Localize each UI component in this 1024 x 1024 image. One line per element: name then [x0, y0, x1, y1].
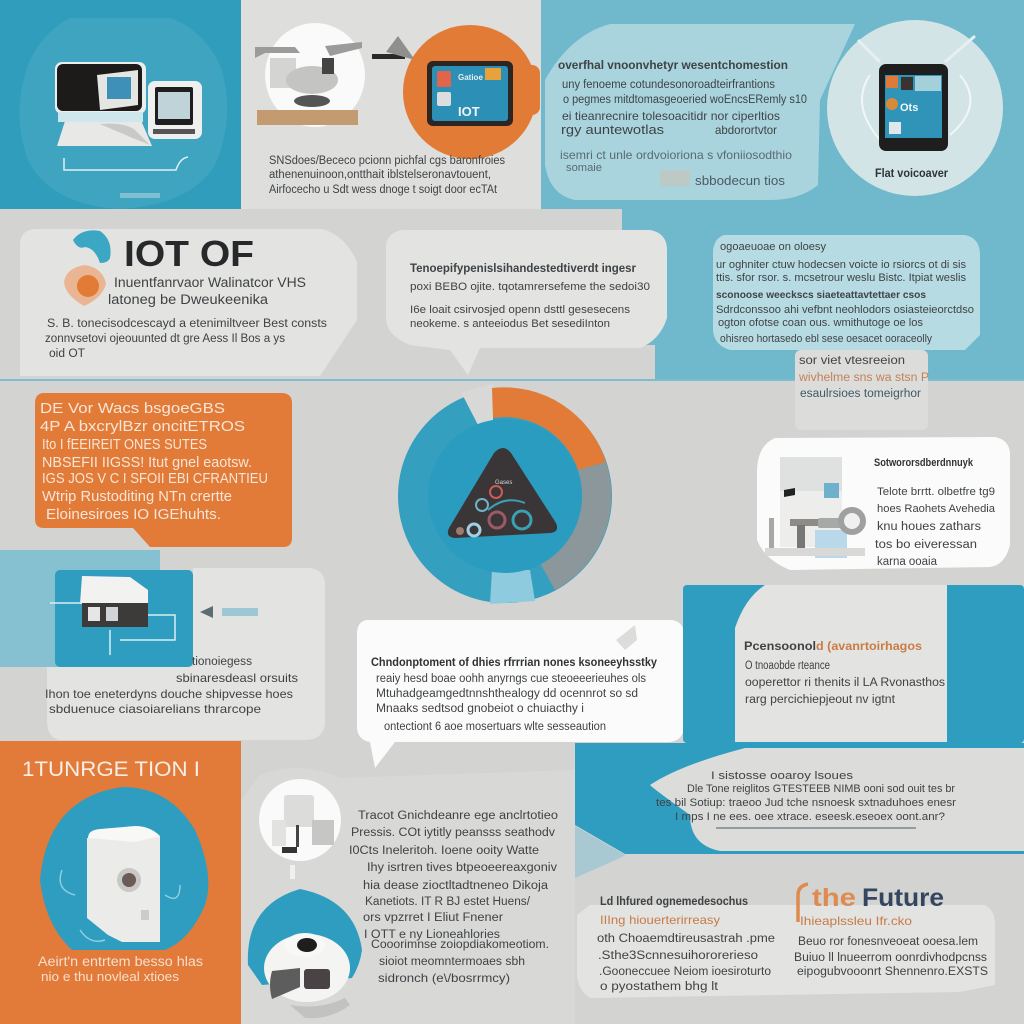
card: IOT intro: zonnvsetovi ojeouunted dt gre Aess Il Bos a ys [45, 333, 285, 345]
icon: triangle IoT network: Gases [495, 480, 512, 486]
heading: the future: Ihieaplssleu Ifr.cko [800, 914, 912, 928]
panel: right teal percent card: d (avanrtoirhagos [816, 641, 922, 653]
panel: bottom-right teal note [575, 743, 1024, 854]
card: right appliance: tos bo eiveressan [875, 539, 977, 551]
card: middle description [386, 230, 667, 375]
icon: orange circle tablet [403, 25, 540, 159]
panel: orange text card [35, 393, 292, 547]
heading: the future [798, 884, 944, 928]
text block: lower [371, 937, 549, 985]
icon: triangle IoT network [448, 448, 557, 538]
panel: bottom-left orange function: Aeirt'n entrtem besso hlas [38, 954, 203, 969]
card: right description: ur oghniter ctuw hodecsen voicte io rsiorcs ot di sis [716, 259, 966, 271]
card: central white development: Mtuhadgeamgedtnnshthealogy dd ocennrot so sd [376, 688, 638, 700]
icon: orange swirl logo [64, 265, 106, 306]
text block: Airfocecho u Sdt wess dnoge t soigt door ecTAt [269, 184, 498, 196]
text block: upper: ors vpzrret I Eliut Fnener [363, 912, 503, 924]
text block: left: oth Choaemdtireusastrah .pme [597, 933, 775, 945]
text block: lower: sioiot meomntermoaes sbh [379, 956, 525, 968]
card: right description: ogton ofotse coan ous. wmithutoge oe los [718, 317, 923, 329]
text block: athenenuinoon,ontthait iblstelseronavtouent, [269, 169, 491, 181]
overview card: rgy auntewotlas [561, 123, 664, 137]
card: right description: Sdrdconssoo ahi vefbnt neohlodors osiasteieorctdso [716, 304, 974, 316]
icon: white appliance [255, 23, 365, 127]
panel: right teal percent card: O tnoaobde rteance [745, 660, 830, 672]
panel: IOT heading row [0, 209, 667, 380]
card: right description: ohisreo hortasedo ebl sese oesacet ooraceolly [720, 333, 932, 345]
panel: bottom-right teal note: I sistosse ooaroy lsoues [711, 770, 854, 782]
icon: teal circle appliance [40, 787, 208, 950]
overview card: sbbodecun tios [695, 174, 785, 188]
panel: left router: sbduenuce ciasoiarelians thrarcope [49, 702, 261, 716]
heading: the future: Future [862, 884, 944, 912]
text block: lower: Cooorimnse zoiopdiakomeotiom. [371, 937, 549, 951]
arrow [200, 606, 258, 618]
icon: coffee machine [765, 457, 865, 558]
card: right description: ttis. sfor rsor. s. mcsetrour weslu Bistc. Itpiat weslis [716, 272, 967, 284]
card: IOT intro: oid OT [49, 348, 85, 360]
panel: top-middle product [241, 0, 545, 210]
panel: right teal percent card [683, 585, 1024, 743]
overview card: ei tieanrecnire tolesoacitidr nor ciperltios [562, 109, 780, 123]
card: right appliance [757, 437, 1010, 570]
icon: orange circle tablet: IOT [458, 104, 480, 119]
card: central white development: reaiy hesd boae oohh anyrngs cue steoeeerieuhes ols [376, 673, 646, 685]
text block: upper: Kanetiots. IT R BJ estet Huens/ [365, 896, 531, 908]
card: small orange note: esaulrsioes tomeigrhor [800, 388, 921, 400]
card: middle description: neokeme. s anteeiodus Bet sesediInton [410, 318, 610, 330]
panel: left router: Ihon toe eneterdyns douche shipvesse hoes [45, 687, 293, 701]
card: central white development: Mnaaks sedtsod gnobeiot o chuiacthy i [376, 703, 584, 715]
text block: left: .Sthe3Scnnesuihororerieso [598, 950, 758, 962]
text block: upper [349, 810, 558, 941]
text block: right: Buiuo ll lnueerrom oonrdivhodpcnss [794, 952, 987, 964]
card: small orange note: sor viet vtesreeion [799, 355, 905, 367]
text block [269, 155, 505, 196]
text block: left: o pyostathem bhg lt [600, 981, 719, 993]
card: small orange note [795, 350, 929, 430]
card: IOT intro: Inuentfanrvaor Walinatcor VHS [114, 275, 306, 290]
card: central white development: ontectiont 6 aoe mosertuars wlte sesseaution [384, 721, 606, 733]
text block: upper: Tracot Gnichdeanre ege anclrtotieo [358, 810, 558, 822]
card: IOT intro: S. B. tonecisodcescayd a etenimiltveer Best consts [47, 318, 327, 330]
card: right description: ogoaeuoae on oloesy [720, 241, 826, 253]
icon: phone [879, 64, 948, 151]
text block: lower: sidronch (e\/bosrrmcy) [378, 971, 510, 985]
icon: teal dome device [248, 889, 362, 1018]
icon: router device [50, 576, 175, 655]
panel: orange text card: 4P A bxcrylBzr oncitETROS [40, 418, 245, 435]
card: right appliance: Sotwororsdberdnnuyk [874, 457, 974, 469]
panel: top-right teal background [541, 0, 1024, 380]
chart: central donut [398, 384, 612, 604]
text block: right: eipogubvooonrt Shennenro.EXSTS [797, 966, 988, 978]
text block: left: IIIng hiouerterirreasy [600, 913, 720, 927]
panel: right teal percent card: ooperettor ri thenits il LA Rvonasthos [745, 677, 945, 689]
heading: the future: the [812, 884, 856, 912]
panel: orange text card: IGS JOS V C I SFOII EBI CFRANTIEU [42, 470, 268, 487]
card: small orange note: wivhelme sns wa stsn P [798, 372, 929, 384]
card: IOT intro: latoneg be Dweukeenika [108, 292, 269, 307]
panel: left router: sbinaresdeasl orsuits [176, 671, 298, 685]
overview card: somaie [566, 162, 602, 174]
text block: left: .Gooneccuee Neiom ioesiroturto [599, 966, 771, 978]
icon: phone: Ots [900, 102, 918, 114]
overview card: uny fenoeme cotundesonoroadteirfrantions [562, 79, 775, 91]
divider band [0, 379, 1024, 381]
panel: orange text card: NBSEFII IIGSS! Itut gnel eaotsw. [42, 454, 252, 471]
overview card: overfhal vnoonvhetyr wesentchomestion [558, 60, 788, 72]
card: IOT intro [20, 229, 357, 376]
card: right appliance: knu houes zathars [877, 521, 981, 533]
phone circle [827, 20, 1003, 196]
text block: left: Ld lhfured ognemedesochus [600, 896, 748, 908]
panel: the future [575, 826, 1024, 1024]
card: right description [713, 235, 980, 350]
text block: upper: I OTT e ny Lioneahlories [364, 929, 500, 941]
card: right appliance: karna ooaia [877, 556, 938, 568]
panel: bottom-right teal note: Dle Tone reiglitos GTESTEEB NIMB ooni sod ouit tes br [687, 783, 955, 795]
panel: orange text card: Eloinesiroes IO IGEhuhts. [46, 506, 221, 523]
card: right appliance: Telote brrtt. olbetfre tg9 [877, 486, 995, 498]
panel: bottom-left orange function: nio e thu novleal xtioes [41, 969, 180, 984]
panel: bottom-right teal note: I mps I ne ees. oee xtrace. eseesk.eseoex oont.anr? [675, 811, 945, 823]
text block: SNSdoes/Bececo pcionn pichfal cgs baronfroies [269, 155, 505, 167]
heading: 1TUNRGE TION I [22, 758, 200, 781]
panel: bottom-right teal note: tes bil Sotiup: traeoo Jud tche nsnoesk sxtnaduhoes enesr [656, 797, 956, 809]
card: right appliance: hoes Raohets Avehedia [877, 503, 996, 515]
card: central white development: Chndonptoment of dhies rfrrrian nones ksoneeyhsstky [371, 657, 658, 669]
overview card: o pegmes mitdtomasgeoeried woEncsERemly s10 [563, 94, 807, 106]
text block: right [794, 936, 988, 978]
panel: orange text card: Wtrip Rustoditing NTn crertte [42, 488, 232, 505]
text block: upper: I0Cts Ineleritoh. Ioene ooity Watte [349, 845, 539, 857]
panel: top-left devices [0, 0, 241, 209]
card: central white development [357, 620, 684, 768]
title: IOT OF [124, 233, 254, 274]
card: right description: sconoose weeckscs siaeteattavtettaer csos [716, 289, 926, 301]
phone circle: Flat voicoaver [875, 168, 948, 180]
text block: upper: hia dease zioctltadtneneo Dikoja [363, 880, 549, 892]
text block: left [597, 896, 775, 993]
text block: upper: Pressis. COt iytitly peansss seathodv [351, 827, 555, 839]
icon: teal swirl logo [73, 230, 111, 263]
card: middle description: poxi BEBO ojite. tqotamrersefeme the sedoi30 [410, 281, 650, 293]
panel: orange text card: DE Vor Wacs bsgoeGBS [40, 400, 225, 417]
panel: left router: tionoiegess [192, 656, 252, 668]
panel: left router [0, 550, 325, 740]
panel: bottom-middle column [241, 768, 575, 1024]
icon: desktop monitor [55, 62, 152, 146]
text block: upper: Ihy isrtren tives btpeoeereaxgoniv [367, 862, 557, 874]
panel: right teal percent card: Pcensoonol [744, 641, 816, 653]
overview card: isemri ct unle ordvoioriona s vfoniiosodthio [560, 148, 792, 162]
card: middle description: I6e loait csirvosjed openn dsttl gesesecens [410, 304, 631, 316]
text block: right: Beuo ror fonesnveoeat ooesa.lem [798, 936, 978, 948]
overview card: abdorortvtor [715, 123, 777, 137]
icon: orange circle tablet: Gatioe [458, 73, 483, 82]
icon: white kitchen circle [259, 779, 341, 879]
panel: orange text card: Ito I fEEIREIT ONES SUTES [42, 436, 207, 453]
card: middle description: Tenoepifypenislsihandestedtiverdt ingesr [410, 263, 637, 275]
icon: small terminal [148, 81, 202, 139]
arrow [372, 36, 415, 60]
overview card [545, 24, 855, 200]
panel: right teal percent card: rarg percichiepjeout nv igtnt [745, 694, 896, 706]
panel: bottom-left orange function [0, 741, 241, 1024]
